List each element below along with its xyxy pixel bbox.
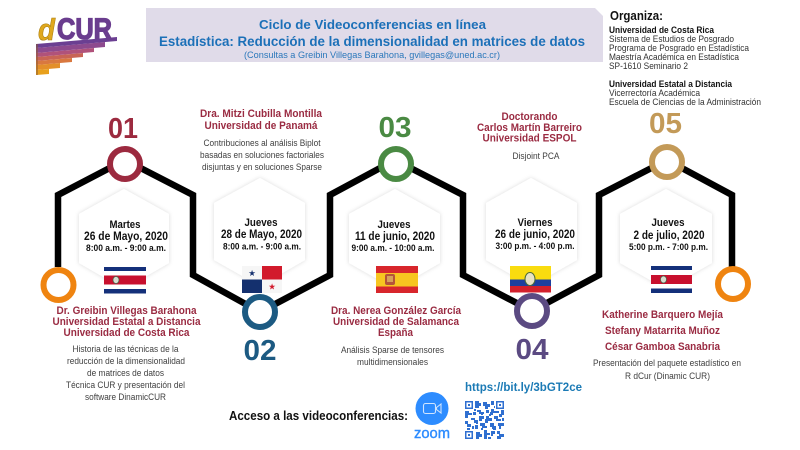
speaker block 01: reducción de la dimensionalidad bbox=[67, 356, 185, 366]
session 03 date: 11 de junio, 2020 bbox=[355, 229, 435, 243]
session 03 number: 03 bbox=[378, 112, 412, 144]
session 04 date bbox=[495, 217, 575, 251]
session 03 date: Jueves bbox=[378, 219, 410, 231]
session 02 date: 28 de Mayo, 2020 bbox=[221, 227, 302, 241]
speaker block 01 bbox=[52, 305, 201, 402]
header banner: Estadística: Reducción de la dimensionalidad en matrices de datos bbox=[159, 34, 585, 49]
icon: zoom: zoom bbox=[414, 425, 450, 442]
organizers block: Maestría Académica en Estadística bbox=[609, 51, 740, 62]
organizers block: Vicerrectoría Académica bbox=[609, 87, 701, 98]
speaker block 05: César Gamboa Sanabria bbox=[605, 341, 721, 353]
speaker block 04: Carlos Martín Barreiro bbox=[477, 122, 582, 134]
QR code bbox=[465, 401, 504, 439]
organizers block: Escuela de Ciencias de la Administración bbox=[609, 96, 761, 107]
session 02 date bbox=[221, 217, 302, 252]
speaker block 03: multidimensionales bbox=[357, 357, 428, 367]
speaker block 04: Disjoint PCA bbox=[512, 151, 560, 161]
speaker block 02: Contribuciones al análisis Biplot bbox=[204, 138, 321, 148]
speaker block 04: Doctorando bbox=[502, 111, 558, 123]
session 05 number: 05 bbox=[649, 108, 682, 140]
session 04 date: 3:00 p.m. - 4:00 p.m. bbox=[496, 241, 574, 251]
timeline nodes bbox=[44, 147, 748, 327]
flag: Costa Rica bbox=[651, 266, 692, 293]
session 01 date: Martes bbox=[110, 219, 140, 231]
speaker block 03: Dra. Nerea González García bbox=[331, 305, 462, 317]
flag: Spain bbox=[376, 266, 418, 293]
speaker block 03: España bbox=[378, 327, 414, 339]
speaker block 02: Dra. Mitzi Cubilla Montilla bbox=[200, 108, 323, 120]
speaker block 01: Universidad Estatal a Distancia bbox=[52, 316, 201, 328]
speaker block 01: software DinamicCUR bbox=[85, 392, 166, 402]
speaker block 02 bbox=[200, 108, 324, 172]
organizers block: Sistema de Estudios de Posgrado bbox=[609, 33, 734, 44]
speaker block 04 bbox=[477, 111, 582, 161]
speaker block 01: Técnica CUR y presentación del bbox=[66, 380, 185, 390]
session 05 date: Jueves bbox=[652, 217, 684, 229]
speaker block 01: Dr. Greibin Villegas Barahona bbox=[56, 305, 197, 317]
organizers block: Universidad de Costa Rica bbox=[609, 24, 715, 35]
organizers block: Organiza: bbox=[610, 9, 663, 23]
hexagon cards bbox=[79, 178, 712, 289]
session 05 date bbox=[629, 217, 708, 252]
speaker block 02: disjuntas y en soluciones Sparse bbox=[202, 162, 322, 172]
session 04 date: 26 de junio, 2020 bbox=[495, 227, 575, 241]
session 01 number: 01 bbox=[108, 113, 138, 145]
session 05 date: 2 de julio, 2020 bbox=[634, 228, 705, 242]
session 05 date: 5:00 p.m. - 7:00 p.m. bbox=[629, 242, 708, 252]
speaker block 02: Universidad de Panamá bbox=[204, 120, 318, 132]
speaker block 03: Universidad de Salamanca bbox=[333, 316, 460, 328]
logo: dCUR: d bbox=[38, 12, 56, 47]
session 04 date: Viernes bbox=[518, 217, 552, 229]
organizers block: Programa de Posgrado en Estadística bbox=[609, 42, 750, 53]
session 02 date: 8:00 a.m. - 9:00 a.m. bbox=[223, 242, 301, 252]
link: https://bit.ly/3bGT2ce bbox=[465, 380, 582, 394]
speaker block 03 bbox=[331, 305, 462, 367]
flag: Ecuador bbox=[510, 266, 551, 292]
speaker block 05: Presentación del paquete estadístico en bbox=[593, 358, 741, 368]
speaker block 02: basadas en soluciones factoriales bbox=[200, 150, 324, 160]
access label: Acceso a las videoconferencias: bbox=[229, 408, 408, 423]
speaker block 05: Katherine Barquero Mejía bbox=[602, 309, 724, 321]
speaker block 01: de matrices de datos bbox=[87, 368, 164, 378]
speaker block 01: Universidad de Costa Rica bbox=[64, 327, 190, 339]
flag: Panama bbox=[242, 266, 282, 293]
timeline connector bbox=[58, 160, 732, 312]
header banner: (Consultas a Greibin Villegas Barahona, gvillegas@uned.ac.cr) bbox=[244, 50, 500, 61]
organizers block: Universidad Estatal a Distancia bbox=[609, 78, 733, 89]
session 02 number: 02 bbox=[244, 335, 276, 367]
flag: Costa Rica bbox=[104, 267, 146, 294]
organizers block: SP-1610 Seminario 2 bbox=[609, 60, 688, 71]
speaker block 04: Universidad ESPOL bbox=[482, 132, 577, 144]
session 03 date bbox=[352, 219, 435, 253]
organizers block bbox=[609, 9, 761, 107]
flag: Panama: ★ bbox=[268, 282, 276, 292]
icon: zoom bbox=[414, 392, 450, 442]
logo: dCUR bbox=[36, 12, 117, 75]
header banner bbox=[146, 8, 603, 62]
session 03 date: 9:00 a.m. - 10:00 a.m. bbox=[352, 243, 434, 253]
session 01 date bbox=[84, 219, 168, 253]
speaker block 05 bbox=[593, 309, 741, 381]
header banner: Ciclo de Videoconferencias en línea bbox=[259, 17, 487, 32]
speaker block 05: Stefany Matarrita Muñoz bbox=[605, 325, 720, 337]
flag: Panama: ★ bbox=[248, 269, 256, 279]
speaker block 01: Historia de las técnicas de la bbox=[72, 344, 178, 354]
logo: dCUR: CUR bbox=[57, 13, 112, 46]
session 01 date: 8:00 a.m. - 9:00 a.m. bbox=[86, 243, 166, 253]
session 02 date: Jueves bbox=[244, 217, 278, 229]
speaker block 05: R dCur (Dinamic CUR) bbox=[625, 371, 710, 381]
session 01 date: 26 de Mayo, 2020 bbox=[84, 229, 168, 243]
speaker block 03: Análisis Sparse de tensores bbox=[341, 345, 444, 355]
session 04 number: 04 bbox=[516, 334, 548, 366]
